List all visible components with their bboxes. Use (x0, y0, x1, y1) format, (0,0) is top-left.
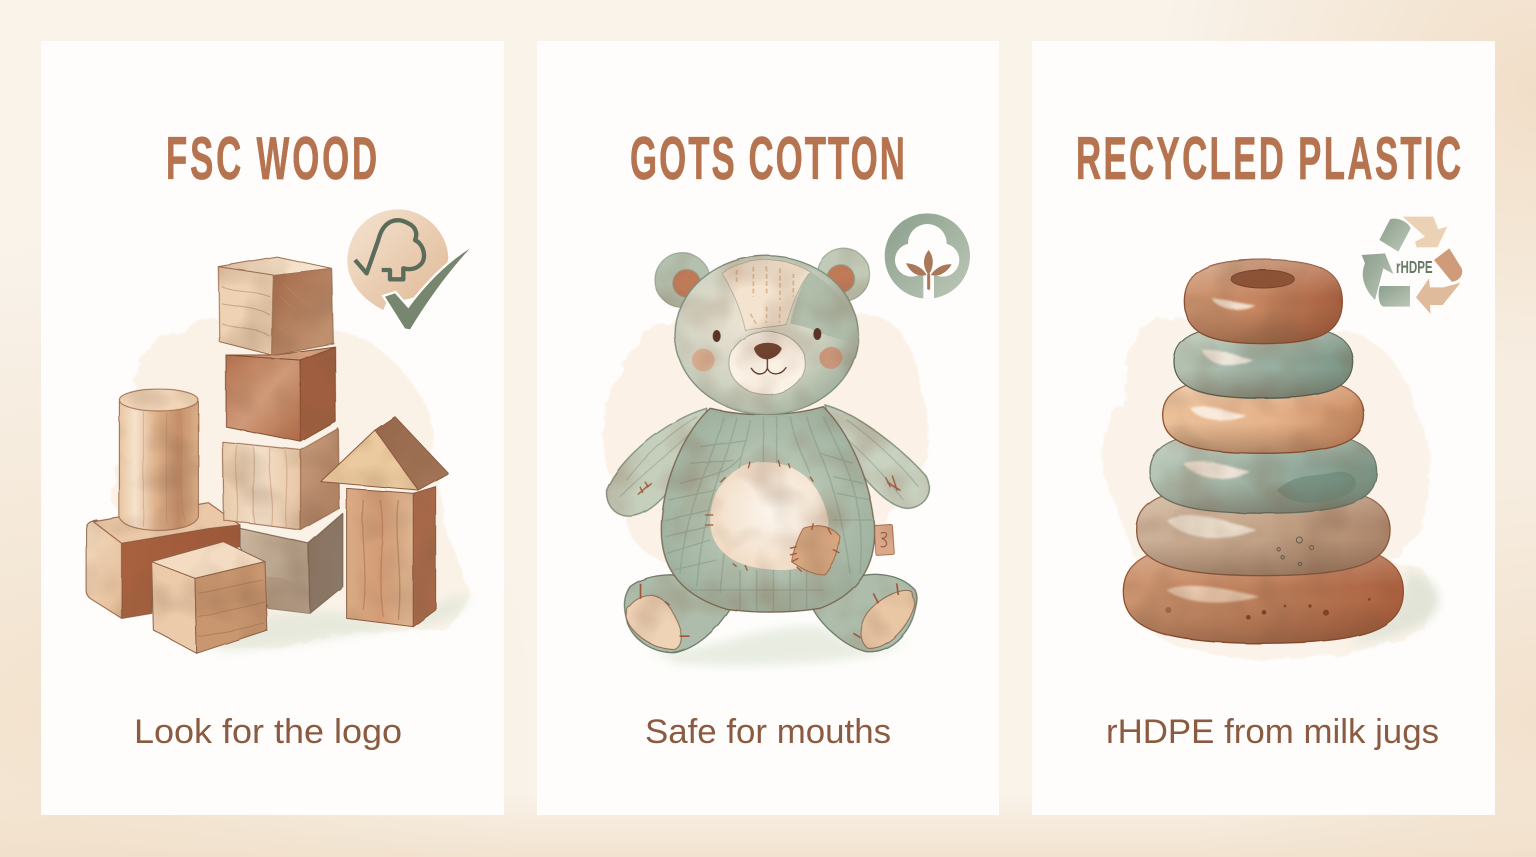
cylinder (119, 389, 198, 530)
pillar and roof (321, 417, 448, 627)
icon: rHDPE recycling symbol (1362, 217, 1462, 314)
ring 4 (1150, 430, 1377, 513)
icon: cotton boll badge (885, 213, 970, 299)
icon: FSC tree logo with check mark (347, 209, 470, 329)
tag (874, 524, 894, 556)
illustration: teddy bear (602, 213, 970, 666)
ring 1 (1184, 260, 1342, 344)
ring 2 (1174, 325, 1353, 398)
second cube (226, 347, 336, 442)
panel: FSC wood (41, 41, 504, 815)
card background (537, 41, 999, 815)
ring stack (1123, 260, 1403, 643)
face (729, 332, 805, 395)
wooden block stack (86, 257, 448, 653)
panel: recycled plastic (1032, 41, 1495, 815)
caption: Look for the logo: Look for the logo (134, 713, 402, 751)
card background (41, 41, 504, 815)
heading: FSC WOOD: FSC WOOD (166, 126, 377, 192)
teddy bear figure (607, 248, 929, 653)
heading: RECYCLED PLASTIC: RECYCLED PLASTIC (1076, 126, 1461, 192)
heading: GOTS COTTON: GOTS COTTON (630, 126, 905, 192)
ring 3 (1163, 377, 1364, 453)
gray cube (240, 513, 343, 613)
panel: GOTS cotton (537, 41, 999, 815)
caption: Safe for mouths: Safe for mouths (645, 713, 891, 751)
ring 6 (1123, 540, 1403, 643)
front cube (152, 542, 267, 653)
top cube (218, 257, 333, 355)
belly patch (710, 462, 828, 570)
illustration: wooden blocks (86, 209, 470, 653)
legs (624, 574, 917, 653)
card background (1032, 41, 1495, 815)
knit texture (665, 417, 873, 613)
icon: rHDPE recycling symbol: rHDPE (1396, 257, 1433, 277)
body (661, 407, 875, 612)
feet (626, 590, 915, 650)
caption: rHDPE from milk jugs: rHDPE from milk jugs (1106, 713, 1439, 751)
head (675, 256, 858, 414)
third cube (222, 428, 339, 530)
ring 5 (1137, 484, 1390, 576)
ears (655, 248, 870, 307)
illustration: stacking rings (1102, 217, 1462, 660)
arms (607, 405, 929, 516)
long block (86, 503, 240, 618)
